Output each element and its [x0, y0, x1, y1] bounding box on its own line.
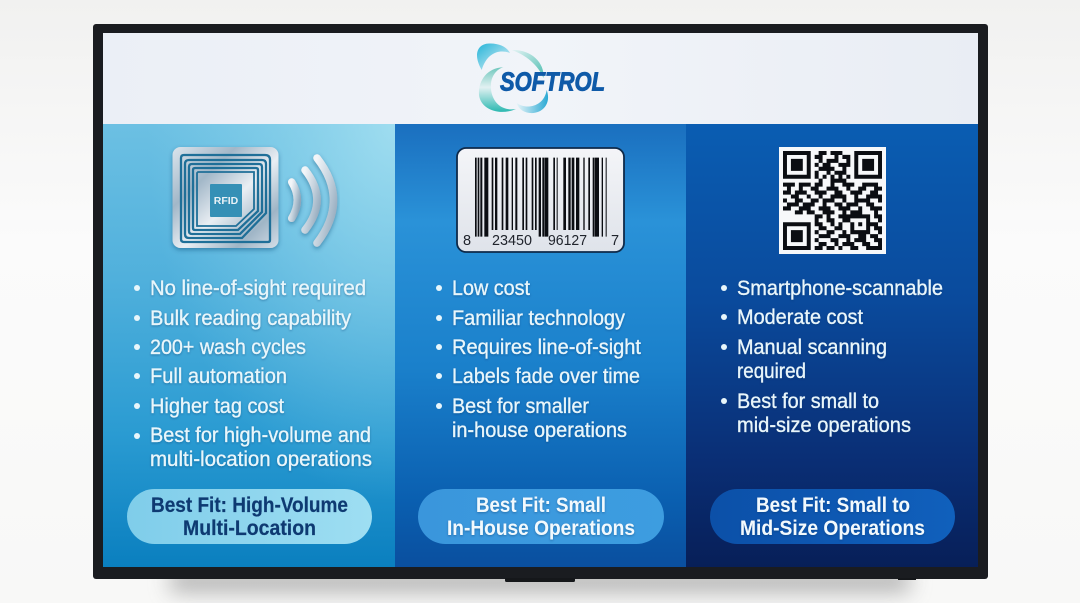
Barcode feature list: Labels fade over time	[452, 365, 640, 388]
QR feature list: required	[737, 360, 806, 383]
panel: Barcode	[395, 124, 686, 567]
barcode digits: 8	[463, 233, 471, 249]
QR feature list: Best for small to	[737, 390, 879, 413]
RFID chip window	[210, 184, 242, 217]
QR feature list: Smartphone-scannable	[737, 277, 943, 300]
barcode digits: 7	[611, 233, 619, 249]
icon: RFID tag with signal waves	[172, 147, 334, 248]
RFID feature list: 200+ wash cycles	[150, 336, 306, 359]
best-fit pill: QR code	[710, 489, 955, 544]
best-fit pill: QR code: Mid-Size Operations	[740, 517, 925, 540]
logo: Softrol: SOFTROL	[500, 66, 605, 96]
Barcode feature list: in-house operations	[452, 419, 627, 442]
Barcode feature list: Requires line-of-sight	[452, 336, 641, 359]
best-fit pill: Barcode	[418, 489, 664, 544]
Barcode feature list: Familiar technology	[452, 307, 625, 330]
RFID feature list: multi-location operations	[150, 448, 372, 471]
QR feature list	[721, 277, 943, 437]
panel: RFID	[103, 124, 395, 567]
RFID feature list: No line-of-sight required	[150, 277, 366, 300]
panel: QR code	[686, 124, 978, 567]
RFID feature list: Full automation	[150, 365, 287, 388]
Barcode feature list	[436, 277, 641, 442]
Barcode feature list: Best for smaller	[452, 395, 589, 418]
barcode digits	[463, 233, 619, 249]
best-fit pill: RFID	[127, 489, 372, 544]
barcode digits: 23450	[492, 233, 532, 249]
best-fit pill: Barcode: In-House Operations	[447, 517, 635, 540]
best-fit pill: RFID: Multi-Location	[183, 517, 316, 540]
icon: barcode label	[457, 148, 624, 252]
logo: Softrol	[477, 43, 605, 113]
RFID feature list: Bulk reading capability	[150, 307, 351, 330]
barcode digits: 96127	[548, 233, 587, 249]
header band	[103, 33, 978, 124]
best-fit pill: RFID: Best Fit: High-Volume	[151, 494, 348, 517]
RFID feature list: Higher tag cost	[150, 395, 284, 418]
RFID feature list: Best for high-volume and	[150, 424, 371, 447]
icon: QR code	[779, 147, 886, 254]
QR feature list: Moderate cost	[737, 306, 863, 329]
Barcode feature list: Low cost	[452, 277, 530, 300]
best-fit pill: QR code: Best Fit: Small to	[756, 494, 910, 517]
RFID feature list	[134, 277, 372, 471]
QR feature list: Manual scanning	[737, 336, 887, 359]
RFID chip window: RFID	[214, 195, 239, 207]
QR feature list: mid-size operations	[737, 414, 911, 437]
television frame	[93, 24, 988, 582]
best-fit pill: Barcode: Best Fit: Small	[476, 494, 606, 517]
